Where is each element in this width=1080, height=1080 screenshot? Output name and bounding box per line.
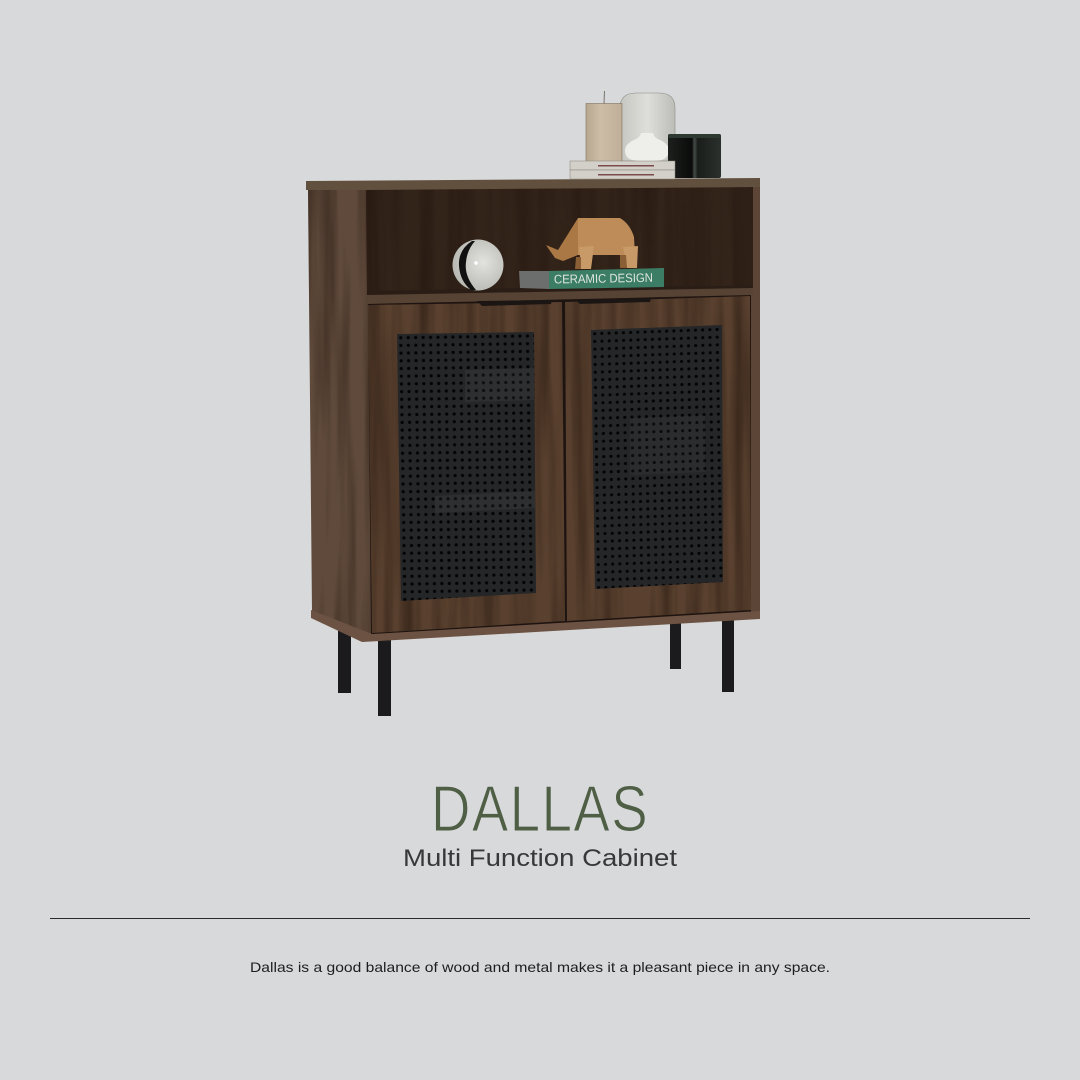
right side panel [751, 186, 760, 612]
stacked books [570, 161, 675, 179]
left door [368, 300, 565, 633]
ceramic design book [519, 268, 664, 289]
top board [306, 178, 760, 190]
title: DALLAS: DALLAS [431, 773, 648, 845]
cabinet legs [338, 615, 734, 716]
door leaf [565, 296, 751, 621]
shelf top surface [367, 286, 753, 295]
cabinet carcass backing [366, 288, 753, 636]
left side panel [308, 188, 371, 636]
decor on top of cabinet [570, 91, 721, 179]
small white vase [625, 133, 669, 161]
decor inside niche [452, 218, 664, 290]
niche right inner wall [733, 186, 753, 288]
wooden rhino [546, 218, 638, 269]
cabinet illustration [306, 91, 760, 716]
divider line [50, 918, 1030, 919]
mesh reflection [435, 368, 535, 513]
perforated mesh panel [397, 332, 536, 601]
ceramic design book: CERAMIC DESIGN [554, 271, 653, 286]
bottom board [311, 610, 760, 642]
shelf board [367, 287, 753, 304]
description text: Dallas is a good balance of wood and metal makes it a pleasant piece in any space. [250, 959, 830, 975]
door leaf [368, 302, 565, 633]
right door [565, 296, 751, 621]
door handle [575, 298, 651, 304]
candle [586, 91, 622, 162]
door handle [477, 300, 552, 306]
subtitle: Multi Function Cabinet [403, 845, 677, 872]
dark glass jar [668, 134, 721, 178]
perforated mesh panel [591, 325, 723, 589]
marble ball [452, 240, 504, 290]
ribbed vase [620, 93, 675, 161]
open niche [366, 186, 753, 295]
mesh reflection [630, 415, 705, 475]
